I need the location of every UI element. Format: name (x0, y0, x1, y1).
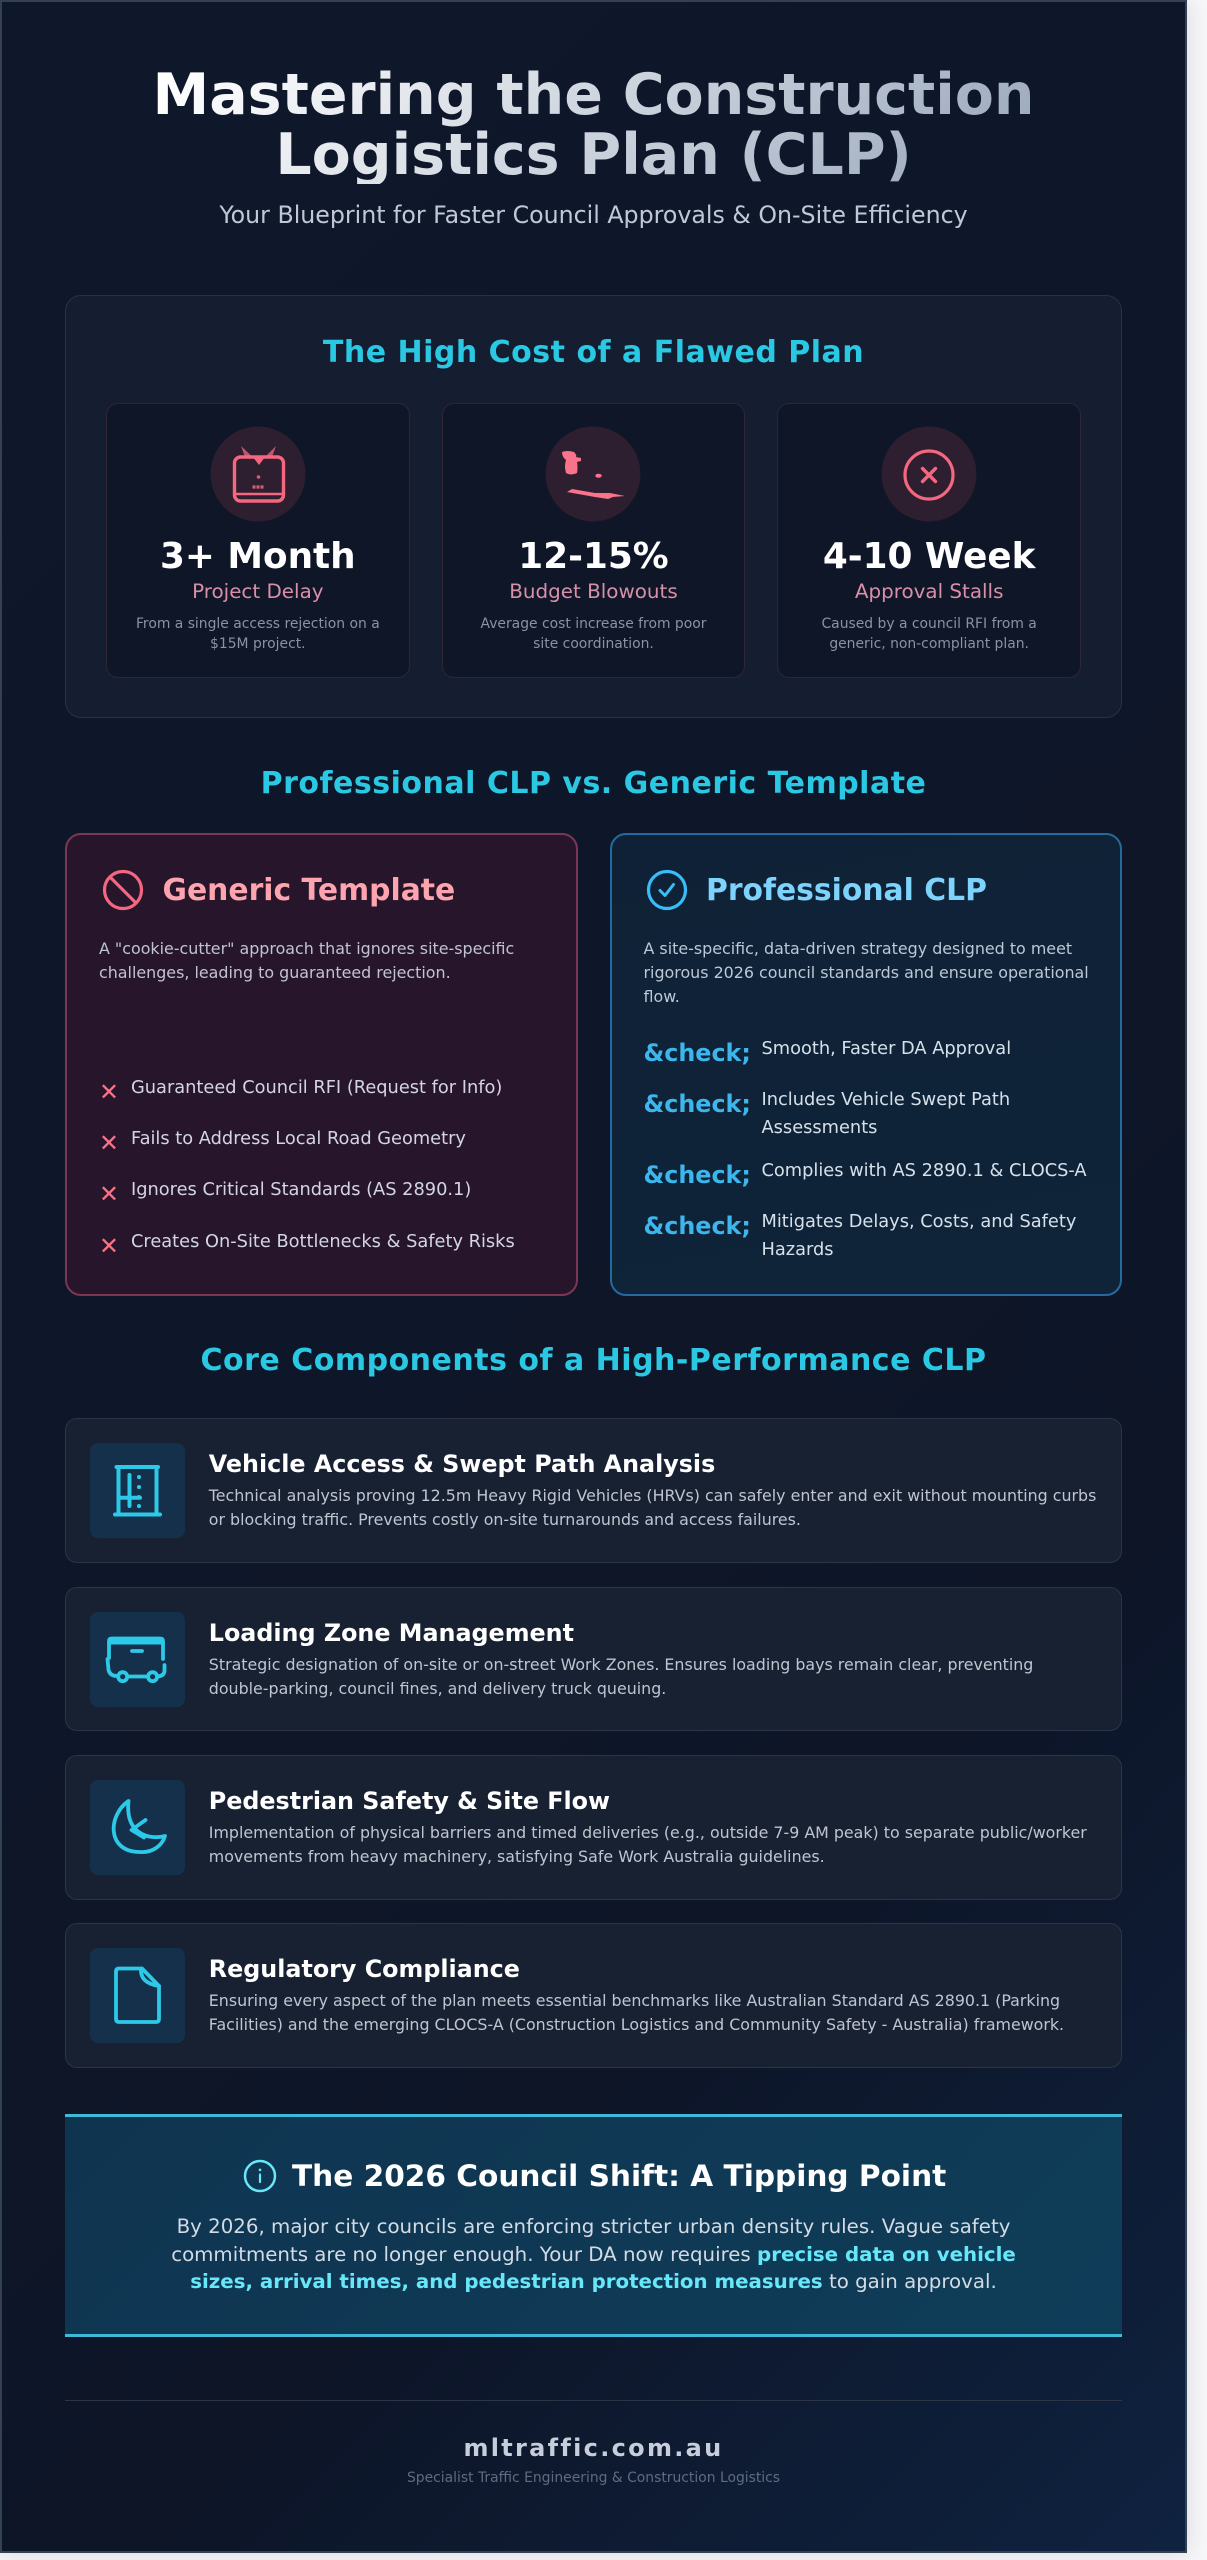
callout text: sizes, arrival times, and pedestrian protection measures to gain approval. (190, 2270, 997, 2293)
list item: Creates On-Site Bottlenecks & Safety Risks (131, 1231, 515, 1252)
component title: Loading Zone Management (209, 1618, 574, 1646)
list item (644, 1160, 1087, 1188)
callout text: By 2026, major city councils are enforcing stricter urban density rules. Vague safety (177, 2215, 1010, 2238)
title: Logistics Plan (CLP) (275, 122, 912, 188)
component text: double-parking, council fines, and delivery truck queuing. (209, 1678, 666, 1698)
description: generic template (99, 938, 514, 982)
icon: ban (102, 870, 144, 910)
component text: Ensuring every aspect of the plan meets essential benchmarks like Australian Standard AS 2890.1 (Parking (209, 1991, 1060, 2010)
list item: ✕ (99, 1078, 119, 1106)
icon: crescent (90, 1780, 185, 1875)
footer brand: mltraffic.com.au (463, 2434, 724, 2462)
stat label: Project Delay (192, 580, 324, 603)
stat description: From a single access rejection on a (136, 616, 380, 632)
component text: movements from heavy machinery, satisfying Safe Work Australia guidelines. (209, 1847, 825, 1866)
stat description: generic, non-compliant plan. (829, 636, 1029, 652)
component card: vehicle access (65, 1418, 1122, 1562)
list item (99, 1077, 502, 1106)
heading: high cost: The High Cost of a Flawed Plan (323, 335, 864, 370)
list item (99, 1128, 466, 1157)
list item: ✕ (99, 1180, 119, 1208)
callout text: commitments are no longer enough. Your DA now requires precise data on vehicle (171, 2242, 1016, 2266)
list item (644, 1089, 1010, 1138)
stat value: 4-10 Week (823, 536, 1035, 577)
component card: regulatory compliance (65, 1923, 1122, 2068)
stat card: budget blowouts (442, 403, 745, 678)
heading: professional clp: Professional CLP (706, 872, 987, 908)
icon: info (244, 2160, 276, 2192)
component text (209, 1823, 1087, 1866)
title (65, 65, 1122, 184)
stat label: Budget Blowouts (509, 580, 678, 603)
component text (209, 1991, 1064, 2034)
heading: generic template: Generic Template (162, 872, 455, 908)
icon: truck (90, 1612, 185, 1706)
component card: pedestrian safety (65, 1755, 1122, 1900)
component text (208, 1486, 1096, 1529)
list item: Includes Vehicle Swept Path (762, 1089, 1010, 1110)
footer (407, 2434, 780, 2486)
callout: 2026 council shift (65, 2114, 1122, 2336)
list item (644, 1038, 1011, 1066)
icon: check circle (646, 870, 688, 910)
description: professional clp (644, 938, 1089, 1006)
icon: budget blowout (546, 426, 640, 522)
list item: ✕ (99, 1129, 119, 1157)
component text: Technical analysis proving 12.5m Heavy Rigid Vehicles (HRVs) can safely enter and exit without mounting curbs (209, 1486, 1096, 1505)
stat label: Approval Stalls (855, 580, 1003, 603)
stat description: $15M project. (210, 636, 306, 652)
component text: Facilities) and the emerging CLOCS-A (Construction Logistics and Community Safety - Australia) framework. (209, 2015, 1064, 2034)
stat description: site coordination. (533, 636, 654, 652)
list item (99, 1179, 471, 1208)
description: generic template: A "cookie-cutter" approach that ignores site-specific (99, 938, 514, 958)
panel: high cost of a flawed plan (65, 295, 1122, 718)
list item: &check; (644, 1090, 751, 1118)
component text: or blocking traffic. Prevents costly on-site turnarounds and access failures. (209, 1510, 801, 1529)
list item (99, 1231, 515, 1260)
icon: circle x (882, 426, 976, 522)
panel: professional clp (610, 833, 1122, 1296)
list item: &check; (644, 1160, 751, 1188)
list item: Smooth, Faster DA Approval (762, 1038, 1011, 1059)
description: professional clp: flow. (644, 986, 680, 1006)
stat card: approval stalls (777, 403, 1081, 678)
list item: Complies with AS 2890.1 & CLOCS-A (762, 1160, 1087, 1181)
component text: Implementation of physical barriers and timed deliveries (e.g., outside 7-9 AM peak) to separate public/worker (209, 1823, 1087, 1842)
component title: Vehicle Access & Swept Path Analysis (209, 1450, 715, 1478)
icon: document (90, 1948, 185, 2043)
description: generic template: challenges, leading to guaranteed rejection. (99, 962, 451, 982)
icon: road (90, 1443, 185, 1538)
component title: Regulatory Compliance (209, 1955, 520, 1983)
component title: Pedestrian Safety & Site Flow (209, 1787, 610, 1815)
stat card: project delay (106, 403, 410, 678)
list item (644, 1211, 1076, 1260)
list item: &check; (644, 1038, 751, 1066)
list item: Hazards (762, 1239, 834, 1260)
list item: ✕ (99, 1232, 119, 1260)
description: professional clp: rigorous 2026 council standards and ensure operational (644, 962, 1089, 982)
heading: core components: Core Components of a High-Performance CLP (200, 1343, 986, 1378)
list item: &check; (644, 1212, 751, 1240)
description: professional clp: A site-specific, data-driven strategy designed to meet (644, 938, 1072, 958)
stat description (480, 616, 706, 652)
stat description: Average cost increase from poor (481, 616, 706, 632)
component text: Strategic designation of on-site or on-street Work Zones. Ensures loading bays remain clear, preventing (209, 1654, 1033, 1674)
title: Mastering the Construction (152, 62, 1034, 128)
icon: tv delay (210, 426, 306, 522)
list item: Ignores Critical Standards (AS 2890.1) (131, 1179, 471, 1200)
component card: loading zone (65, 1586, 1122, 1731)
list item: Assessments (762, 1117, 877, 1138)
subtitle: Your Blueprint for Faster Council Approvals & On-Site Efficiency (219, 201, 968, 229)
footer tagline: Specialist Traffic Engineering & Construction Logistics (407, 2470, 780, 2486)
panel: generic template (65, 833, 578, 1296)
component text (209, 1654, 1033, 1698)
stat description (136, 616, 380, 652)
list item: Fails to Address Local Road Geometry (131, 1128, 466, 1149)
callout text (171, 2215, 1016, 2293)
stat description: Caused by a council RFI from a (821, 616, 1037, 632)
stat description (821, 616, 1037, 652)
stat value: 12-15% (518, 536, 669, 577)
heading: comparison: Professional CLP vs. Generic Template (261, 766, 926, 800)
list item: Guaranteed Council RFI (Request for Info) (131, 1077, 502, 1098)
stat value: 3+ Month (160, 536, 356, 577)
list item: Mitigates Delays, Costs, and Safety (762, 1211, 1076, 1232)
callout heading: The 2026 Council Shift: A Tipping Point (292, 2159, 946, 2193)
